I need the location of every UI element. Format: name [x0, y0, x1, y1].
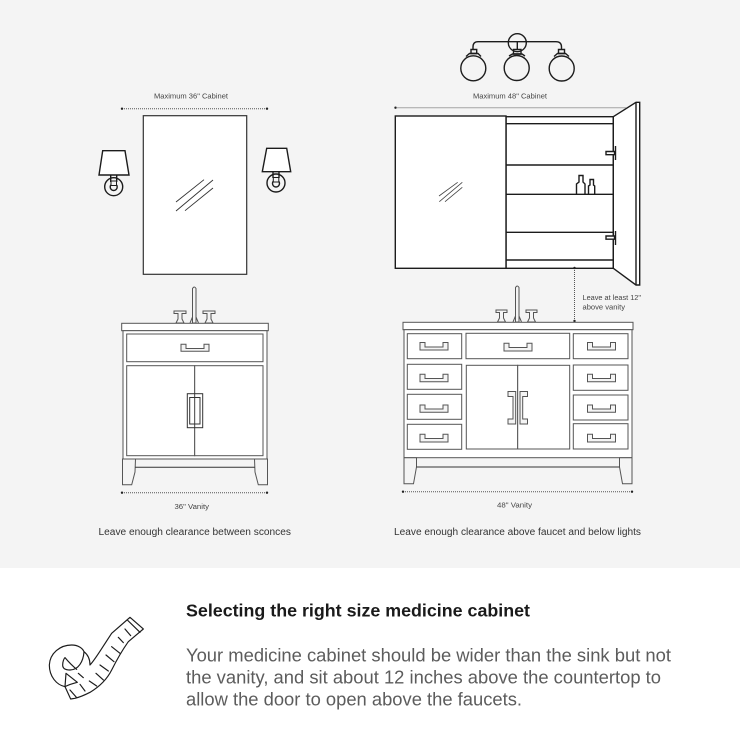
left drawers — [407, 334, 462, 449]
cabinet body — [123, 331, 267, 459]
faucet — [174, 287, 215, 323]
label: leave at least 12 inches: Leave at least 12" — [582, 295, 642, 302]
doors — [466, 365, 570, 449]
dimension line: 48 vanity — [402, 490, 633, 493]
icon: tape measure — [49, 617, 143, 699]
faucet — [496, 286, 537, 322]
background panel — [0, 0, 740, 568]
doors — [127, 366, 263, 456]
dimension line: 36 vanity — [121, 492, 268, 494]
door handles — [187, 394, 203, 428]
caption: sconces: Leave enough clearance between sconces — [98, 527, 291, 538]
legs and apron — [404, 458, 632, 484]
icon: three globe light — [461, 34, 574, 81]
drawer handles — [420, 342, 616, 442]
dimension line: 12 inch clearance — [573, 267, 576, 322]
label: 48 vanity: 48" Vanity — [497, 502, 533, 510]
36 inch mirror cabinet — [143, 116, 247, 274]
label: maximum 48 cabinet: Maximum 48" Cabinet — [473, 94, 547, 100]
36 inch vanity — [122, 287, 268, 485]
48 inch medicine cabinet — [395, 102, 640, 285]
legs and apron — [122, 459, 268, 485]
body text — [186, 646, 671, 710]
cabinet interior — [506, 117, 613, 268]
48 inch vanity — [403, 286, 633, 484]
center drawer — [466, 333, 570, 359]
bottles on shelf — [576, 176, 595, 194]
label: maximum 36 cabinet: Maximum 36" Cabinet — [154, 94, 228, 100]
countertop — [122, 323, 268, 331]
dimension line: 48 cabinet — [394, 106, 626, 109]
icon: right sconce — [262, 148, 291, 192]
right drawers — [573, 334, 628, 449]
label: leave at least 12 inches: above vanity — [582, 304, 626, 312]
label: 36 vanity: 36" Vanity — [174, 504, 210, 511]
caption: faucet and lights: Leave enough clearance above faucet and below lights — [394, 527, 641, 538]
body text: the vanity, and sit about 12 inches above the countertop to — [186, 668, 661, 688]
countertop — [403, 322, 633, 330]
heading: Selecting the right size medicine cabinet — [186, 600, 530, 620]
body text: Your medicine cabinet should be wider than the sink but not — [186, 646, 671, 666]
label: leave at least 12 inches — [582, 295, 642, 312]
door handles — [508, 392, 528, 424]
body text: allow the door to open above the faucets. — [186, 690, 522, 710]
door handles — [606, 146, 616, 245]
open door — [613, 102, 640, 285]
drawer — [127, 334, 263, 362]
dimension line: 36 cabinet — [121, 108, 268, 110]
cabinet body — [404, 330, 632, 458]
icon: left sconce — [99, 151, 129, 196]
closed mirror door — [395, 116, 506, 268]
drawer handle — [181, 344, 209, 351]
